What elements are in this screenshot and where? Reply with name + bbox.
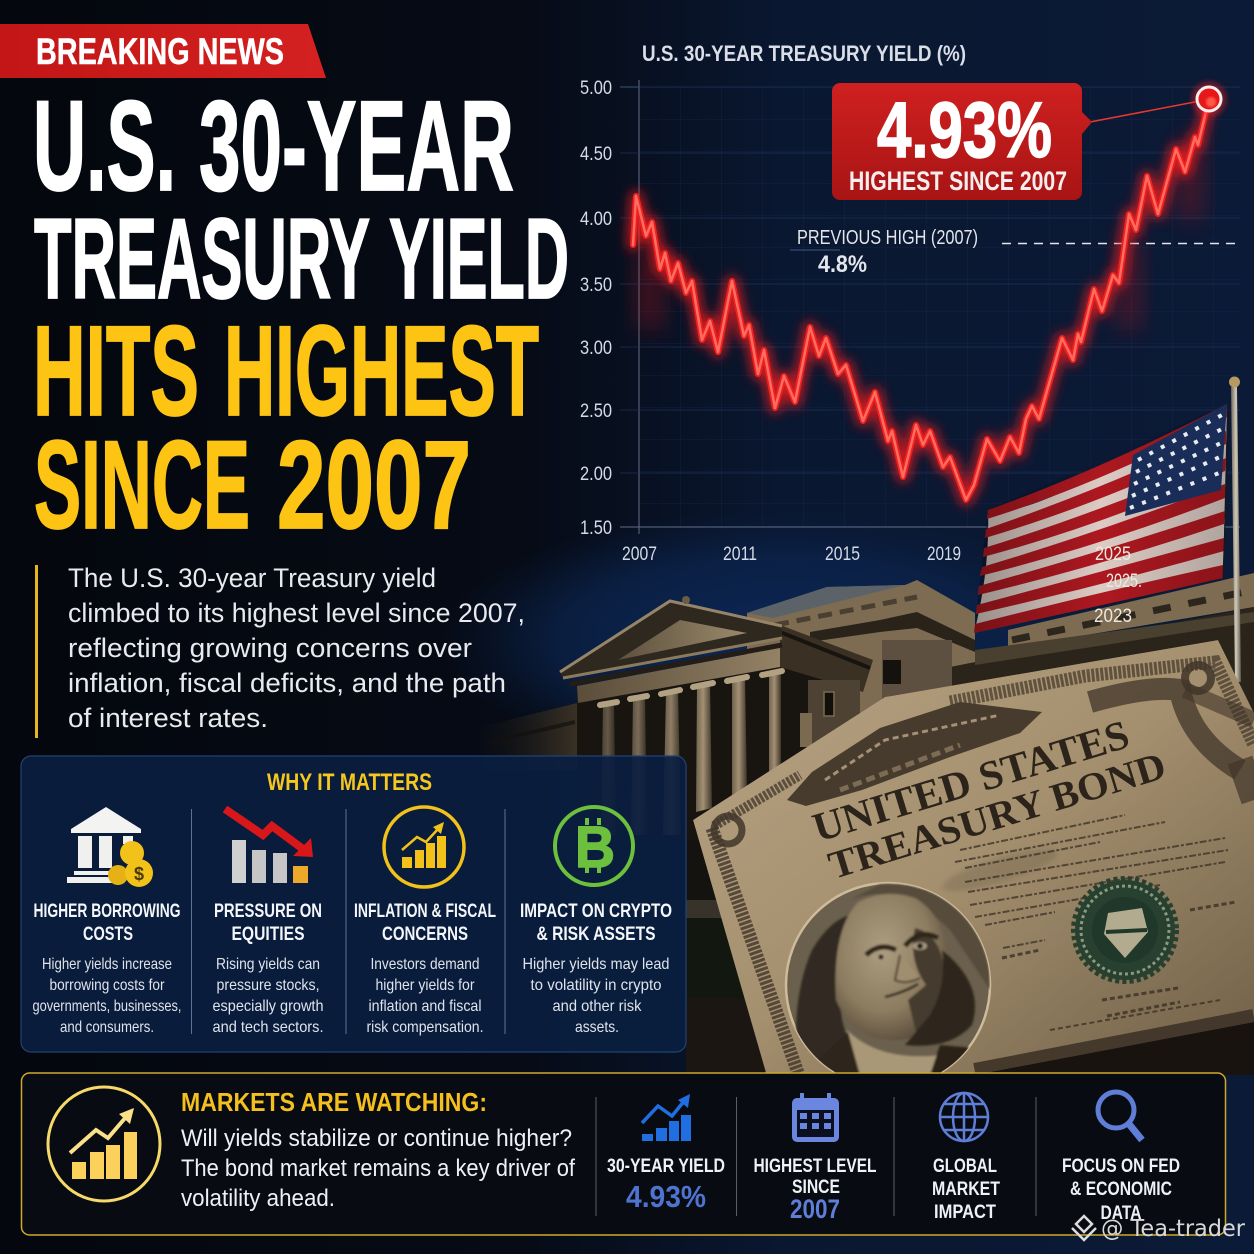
entablature <box>577 648 780 703</box>
item: impact on crypto: IMPACT ON CRYPTO <box>520 901 672 922</box>
stat: focus on fed: FOCUS ON FED <box>1062 1156 1180 1177</box>
title: TREASURY <box>34 196 370 323</box>
item: impact on crypto <box>520 807 672 1036</box>
stat: 30-year yield <box>607 1094 725 1214</box>
intro paragraph: inflation, fiscal deficits, and the path <box>68 668 506 698</box>
stat: focus on fed <box>1062 1092 1180 1224</box>
bond serial marks <box>1002 902 1236 1030</box>
y axis labels: 3.50 <box>580 275 612 296</box>
y axis labels: 4.50 <box>580 144 612 165</box>
item: impact on crypto: and other risk <box>552 998 642 1015</box>
stat: 30-year yield: 4.93% <box>626 1179 706 1214</box>
x axis labels over flag: 2025. <box>1106 571 1142 592</box>
item: higher borrowing costs: borrowing costs for <box>50 977 165 994</box>
bond stains <box>944 849 1056 891</box>
callout: 4.93%: HIGHEST SINCE 2007 <box>849 166 1067 196</box>
chart grid <box>639 87 1239 527</box>
stat: highest level since 2007: HIGHEST LEVEL <box>754 1156 877 1177</box>
icon: falling bars with red arrow <box>225 809 313 883</box>
previous high marker: PREVIOUS HIGH (2007) <box>797 227 978 249</box>
item: inflation and fiscal concerns: risk compensation. <box>366 1019 484 1036</box>
columns <box>600 671 782 835</box>
title: SINCE <box>34 416 250 555</box>
y axis labels: 3.00 <box>580 338 612 359</box>
item: higher borrowing costs: COSTS <box>83 924 133 945</box>
icon: rising chart in circle <box>384 807 464 887</box>
icon: watermark logo <box>1072 1216 1096 1240</box>
item: impact on crypto: assets. <box>575 1019 619 1036</box>
item: pressure on equities: and tech sectors. <box>212 1019 324 1036</box>
previous high marker <box>790 227 1240 278</box>
x axis labels: 2019 <box>927 544 961 565</box>
item: impact on crypto: to volatility in crypto <box>530 977 662 994</box>
icon: calendar <box>792 1093 839 1142</box>
x axis labels: 2007 <box>622 544 657 565</box>
x axis labels: 2015 <box>825 544 860 565</box>
x axis labels <box>622 544 961 565</box>
callout: 4.93%: 4.93% <box>877 85 1052 174</box>
y axis labels: 4.00 <box>580 209 612 230</box>
watching text <box>181 1125 575 1212</box>
item: higher borrowing costs <box>32 807 182 1036</box>
left wing <box>480 703 577 770</box>
panel: markets are watching <box>22 1073 1226 1235</box>
item: higher borrowing costs: HIGHER BORROWING <box>34 901 180 922</box>
y axis labels: 1.50 <box>580 518 612 539</box>
pediment <box>560 600 782 678</box>
panel heading: WHY IT MATTERS <box>267 769 432 796</box>
item: higher borrowing costs: and consumers. <box>60 1019 154 1036</box>
breaking news banner <box>0 24 326 78</box>
title: 2007 <box>277 416 471 555</box>
title: YIELD <box>389 196 569 323</box>
icon: rising chart in gold circle <box>48 1087 160 1201</box>
bond heading: TREASURY BOND <box>824 744 1171 888</box>
y axis labels: 2.50 <box>580 401 612 422</box>
stat: global market impact: IMPACT <box>934 1202 996 1223</box>
stat: global market impact <box>932 1093 1000 1223</box>
icon: blue rising bars <box>642 1094 691 1141</box>
callout: 4.93% <box>832 81 1227 200</box>
icon: american flag <box>974 376 1241 682</box>
item: inflation and fiscal concerns: inflation and fiscal <box>368 998 482 1015</box>
title: 30-YEAR <box>199 75 514 218</box>
x axis labels: 2011 <box>723 544 757 565</box>
item: inflation and fiscal concerns: INFLATION & FISCAL <box>354 901 496 922</box>
icon: bank with coins <box>67 807 153 887</box>
intro paragraph <box>35 563 525 738</box>
scene: treasury building <box>480 573 1254 1075</box>
bond seal <box>1075 880 1175 980</box>
panel: why it matters <box>21 756 686 1052</box>
icon: bitcoin <box>555 807 633 885</box>
stat: highest level since 2007: SINCE <box>792 1177 840 1198</box>
stat: highest level since 2007 <box>754 1093 877 1224</box>
intro paragraph: of interest rates. <box>68 703 268 733</box>
item: pressure on equities: EQUITIES <box>232 924 304 945</box>
sky glow behind building <box>440 510 1120 770</box>
stat: global market impact: GLOBAL <box>933 1156 997 1177</box>
y axis labels: 5.00 <box>580 78 612 99</box>
item: higher borrowing costs: governments, businesses, <box>32 998 182 1015</box>
intro paragraph: The U.S. 30-year Treasury yield <box>68 563 436 593</box>
item: inflation and fiscal concerns: Investors demand <box>370 956 480 973</box>
stat: focus on fed: & ECONOMIC <box>1070 1179 1172 1200</box>
title <box>33 75 569 555</box>
item: inflation and fiscal concerns <box>354 807 496 1036</box>
breaking news banner: BREAKING NEWS <box>36 31 284 72</box>
x axis labels over flag: 2023 <box>1094 606 1132 627</box>
treasury bond certificate <box>693 640 1254 1090</box>
item: inflation and fiscal concerns: CONCERNS <box>382 924 468 945</box>
y axis labels <box>580 78 612 539</box>
bond heading: UNITED STATES <box>807 711 1134 851</box>
watching text: volatility ahead. <box>181 1185 335 1212</box>
rear right wing <box>747 580 975 720</box>
item: pressure on equities <box>212 809 324 1036</box>
bond portrait <box>786 883 995 1090</box>
item: pressure on equities: Rising yields can <box>216 956 320 973</box>
watching text: The bond market remains a key driver of <box>181 1155 575 1182</box>
icon: bank with coins: $ <box>134 864 144 884</box>
item: impact on crypto: Higher yields may lead <box>522 956 670 973</box>
intro paragraph: reflecting growing concerns over <box>68 633 472 663</box>
icon: bitcoin: B <box>575 815 615 880</box>
watching text: Will yields stabilize or continue higher? <box>181 1125 572 1152</box>
x axis labels over flag <box>1094 544 1142 627</box>
title: HIGHEST <box>224 300 539 443</box>
portico side <box>780 625 873 692</box>
portico interior <box>577 665 860 840</box>
icon: globe <box>940 1093 988 1141</box>
intro paragraph: climbed to its highest level since 2007, <box>68 598 525 628</box>
item: impact on crypto: & RISK ASSETS <box>536 924 656 945</box>
item: pressure on equities: especially growth <box>212 998 324 1015</box>
steps and lawn <box>686 840 776 900</box>
title: U.S. <box>33 75 176 218</box>
icon: magnifying glass <box>1098 1092 1142 1140</box>
stat: highest level since 2007: 2007 <box>790 1194 840 1224</box>
chart title: U.S. 30-YEAR TREASURY YIELD (%) <box>642 41 966 66</box>
title: HITS <box>33 300 199 443</box>
bond top banner <box>787 702 1042 806</box>
x axis labels over flag: 2025 <box>1095 544 1131 565</box>
stat: 30-year yield: 30-YEAR YIELD <box>607 1156 725 1177</box>
y axis labels: 2.00 <box>580 464 612 485</box>
stat: focus on fed: DATA <box>1100 1203 1142 1224</box>
bond ornate borders <box>712 662 1254 1073</box>
previous high marker: 4.8% <box>818 251 867 278</box>
item: pressure on equities: PRESSURE ON <box>214 901 322 922</box>
yield line <box>633 99 1209 500</box>
bond fine print <box>955 815 1228 948</box>
item: pressure on equities: pressure stocks, <box>216 977 320 994</box>
watching heading: MARKETS ARE WATCHING: <box>181 1087 487 1117</box>
item: higher borrowing costs: Higher yields increase <box>42 956 172 973</box>
item: inflation and fiscal concerns: higher yields for <box>376 977 475 994</box>
watermark: @ Tea-trader <box>1101 1216 1246 1242</box>
stat: global market impact: MARKET <box>932 1179 1000 1200</box>
line chart: 30-year treasury yield <box>580 41 1240 565</box>
